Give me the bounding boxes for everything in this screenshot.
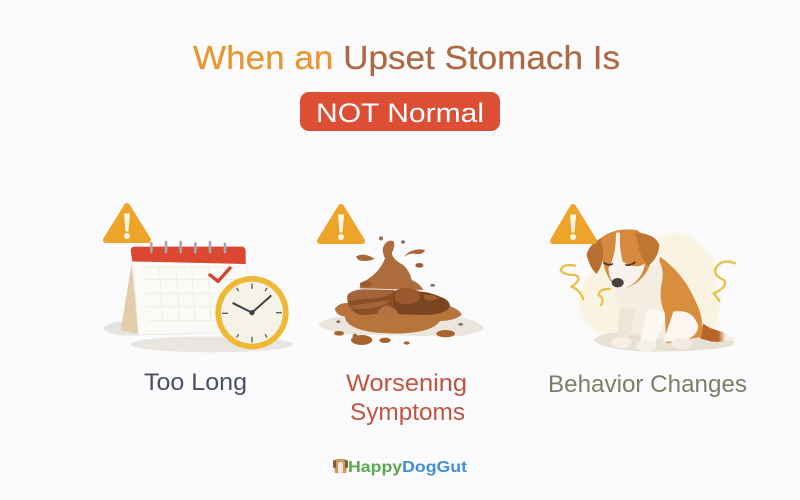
logo: HappyDogGut [333,459,468,476]
panel: too long [104,206,293,396]
icon: warning triangle [553,207,594,241]
label: Worsening Symptoms: Symptoms [350,399,465,426]
panel: behavior changes [548,207,747,398]
icon: dog head [333,459,348,473]
title: When an Upset Stomach Is [193,39,620,76]
illustration: calendar and clock [104,242,293,352]
icon: warning triangle [320,207,362,241]
illustration: sad puppy [561,229,737,352]
label: Worsening Symptoms: Worsening [346,370,467,397]
wordmark: Happy DogGut [348,459,468,476]
badge: NOT Normal: NOT Normal [316,98,484,128]
label: Behavior Changes: Behavior Changes [548,371,747,398]
badge: NOT Normal [300,92,500,131]
icon: warning triangle [106,206,148,240]
illustration: stool pile [318,236,484,345]
label: Worsening Symptoms [346,370,467,426]
panel: worsening symptoms [318,207,484,426]
label: Too Long: Too Long [144,369,247,396]
